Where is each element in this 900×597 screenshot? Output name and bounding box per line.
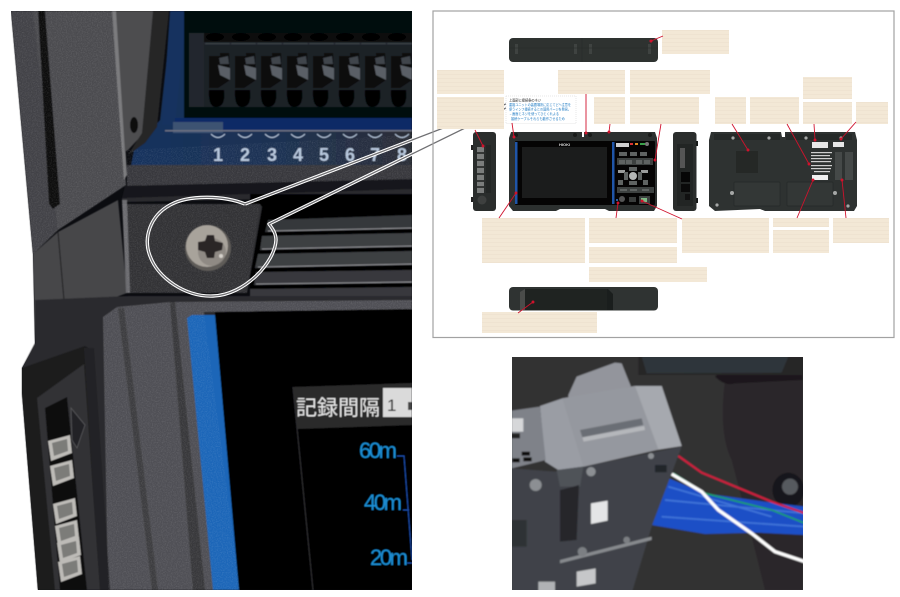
- car floor background: [512, 357, 803, 590]
- terminal numbers 1 to 8: 3: [267, 145, 277, 165]
- side connector panel: [22, 346, 110, 590]
- diagram frame: [433, 11, 894, 338]
- terminal numbers 1 to 8: [211, 134, 409, 165]
- terminal numbers 1 to 8: 4: [293, 145, 303, 165]
- device front view: [509, 132, 657, 211]
- control panel: [616, 142, 654, 204]
- callout note box: 使うインフ接続するとの固用バージを発見。: [509, 106, 571, 112]
- callout note box: 重複ユニットの装置場所に応じてどへ注意を: [509, 102, 571, 107]
- front housing: [22, 296, 412, 590]
- callout: magnifier ring and leader lines: [147, 104, 506, 296]
- recording interval screen UI: 40m: [364, 490, 402, 515]
- device front view: HIOKI: [559, 142, 570, 147]
- panel: product overview diagram: [433, 11, 894, 338]
- callout note box: [506, 96, 576, 124]
- screw plate: [122, 204, 262, 293]
- screen with blue bezel: [187, 309, 412, 590]
- device left side view: [471, 132, 496, 211]
- terminal numbers 1 to 8: 7: [370, 145, 380, 165]
- terminal numbers 1 to 8: 2: [240, 145, 250, 165]
- callout note box: 接続ケーブルそれらも動作させるため: [511, 116, 565, 121]
- device top view: [509, 38, 658, 62]
- wire bundle: [652, 456, 805, 562]
- annotation boxes: [437, 30, 889, 333]
- unit top with mounting flange: [568, 363, 631, 400]
- unit underside: [512, 447, 682, 593]
- callout note box: 上面部に接続条のネジ: [509, 98, 541, 102]
- terminal bay: [128, 11, 412, 180]
- terminal numbers 1 to 8: 6: [345, 145, 355, 165]
- device right side view: [673, 132, 698, 211]
- terminal numbers 1 to 8: 8: [397, 145, 407, 165]
- console keys: [512, 418, 523, 432]
- device bottom view: [509, 287, 658, 310]
- vent ribs: [250, 194, 412, 296]
- photo backdrop: [11, 11, 412, 590]
- unit details: [560, 485, 579, 542]
- red leader lines: [475, 36, 856, 313]
- recording interval screen UI: 20m: [370, 545, 408, 570]
- recording interval screen UI: [293, 383, 412, 590]
- screw: [185, 225, 231, 271]
- panel: close-up photo of screw and terminals: [11, 11, 412, 590]
- device back view: [709, 132, 857, 211]
- left housing panels: [11, 11, 126, 254]
- recording interval screen UI: 60m: [359, 438, 397, 463]
- panel: photo of wired unit in vehicle: [512, 357, 803, 590]
- terminal numbers 1 to 8: 5: [319, 145, 329, 165]
- housing ledge: [127, 165, 412, 186]
- terminal numbers 1 to 8: 1: [213, 145, 223, 165]
- recording interval screen UI: 1: [387, 396, 396, 415]
- surface grain on housing: [11, 11, 412, 590]
- callout note box: ←画面とネジを使ってひとくれよる: [509, 111, 559, 116]
- recording interval screen UI: 記録間隔: [296, 397, 380, 420]
